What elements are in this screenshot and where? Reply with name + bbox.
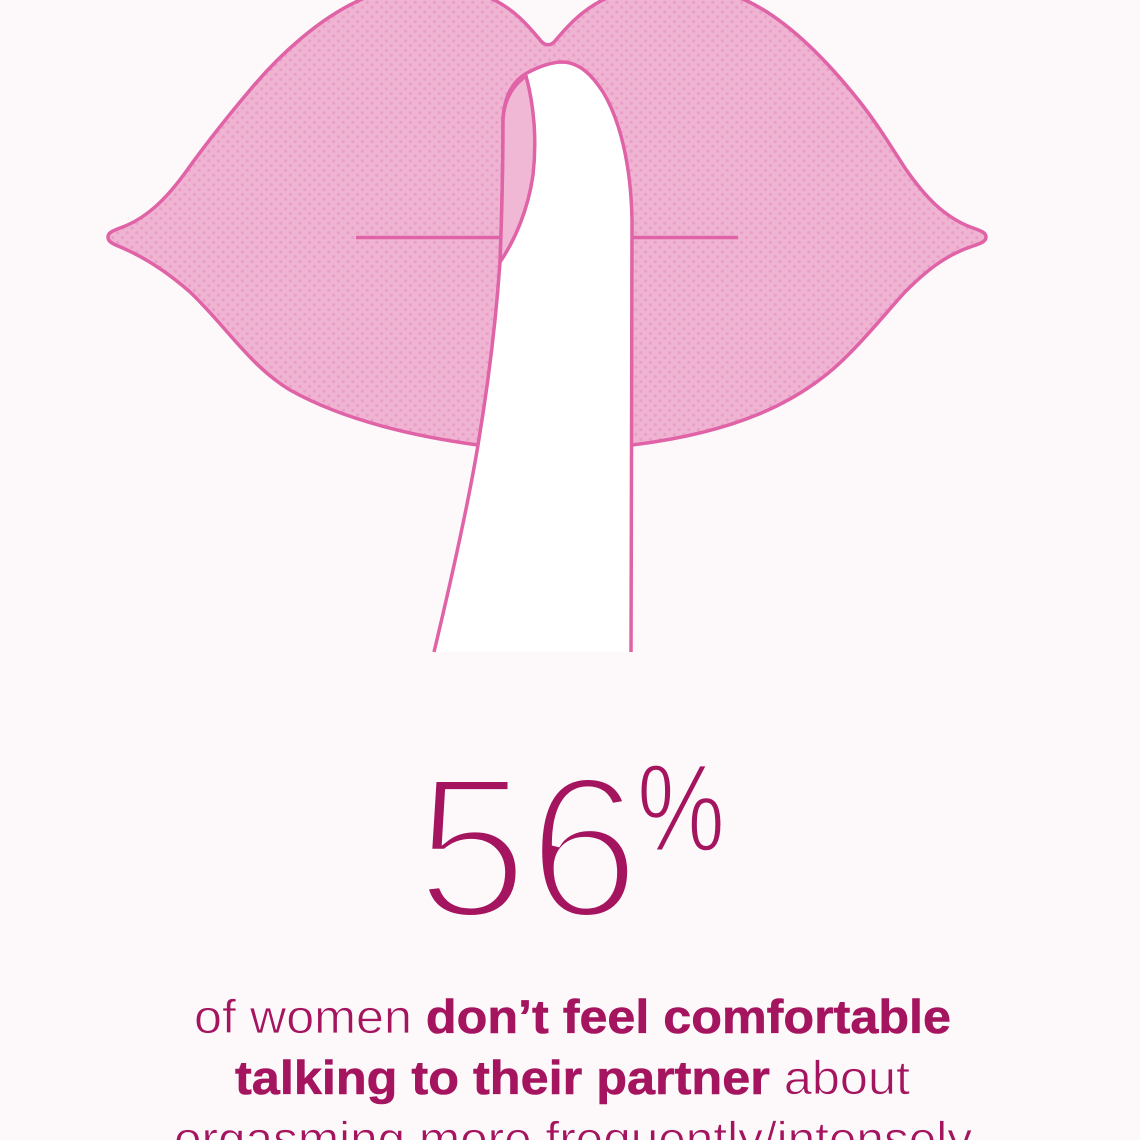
percent sign: % <box>637 740 725 878</box>
lip parting line right <box>632 236 738 239</box>
lip parting line left <box>356 236 500 239</box>
fingernail <box>500 76 535 262</box>
finger <box>434 62 632 652</box>
illustration: lips with finger <box>108 0 986 652</box>
caption line 2: talking to their partner about <box>235 1051 910 1104</box>
lips <box>108 0 986 445</box>
statistic: 56% <box>416 734 725 960</box>
caption line 1: of women don’t feel comfortable <box>194 990 951 1043</box>
caption text <box>174 990 973 1140</box>
number 56: 56 <box>416 734 640 960</box>
